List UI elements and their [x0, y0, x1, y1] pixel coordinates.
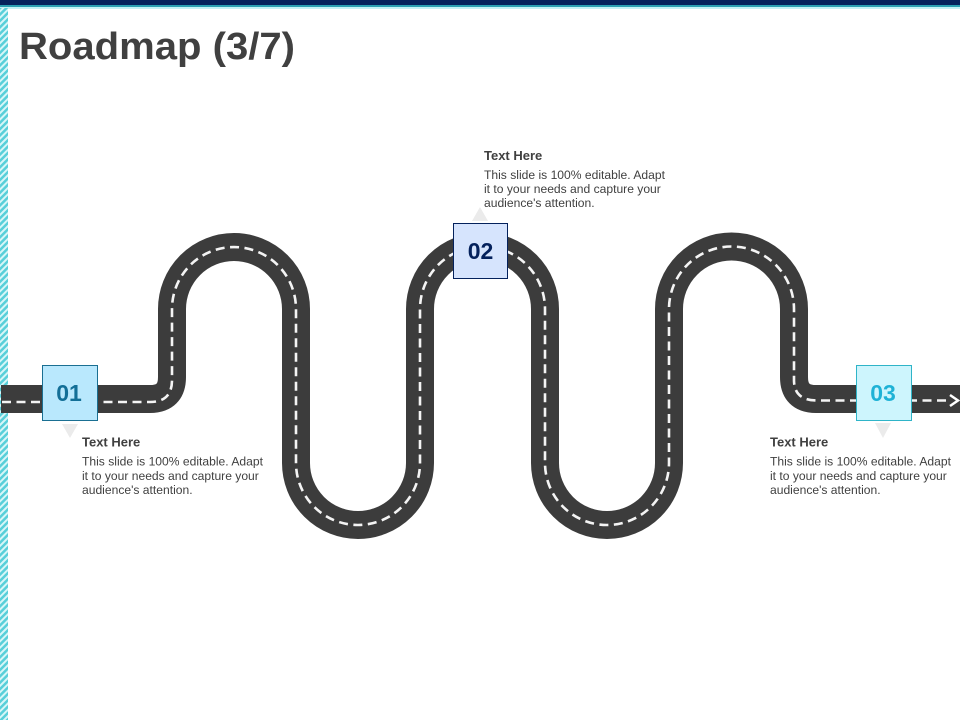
pointer 01: [62, 424, 78, 438]
number 02: 02: [468, 238, 493, 264]
text block 02: Text Here: [484, 148, 542, 163]
text block 02: This slide is 100% editable. Adapt: [484, 168, 666, 182]
text block 01: This slide is 100% editable. Adapt: [82, 454, 264, 468]
winding road: [1, 247, 960, 525]
text block 03: audience's attention.: [770, 483, 881, 497]
text block 03: it to your needs and capture your: [770, 469, 947, 483]
text block 02: audience's attention.: [484, 196, 595, 210]
text block 03: This slide is 100% editable. Adapt: [770, 454, 952, 468]
milestone 03: [856, 366, 912, 438]
road end arrow: [950, 395, 958, 406]
text block 01: [82, 434, 264, 497]
number 03: 03: [870, 380, 896, 406]
number box 01: [42, 366, 98, 420]
text block 01: Text Here: [82, 434, 140, 450]
text block 01: it to your needs and capture your: [82, 469, 259, 483]
number 01: 01: [56, 380, 82, 406]
text block 02: it to your needs and capture your: [484, 182, 661, 196]
number box 02: [454, 224, 508, 278]
text block 03: [770, 434, 952, 497]
number box 03: [856, 366, 912, 420]
milestone 01: [42, 366, 98, 438]
top header band: [0, 0, 960, 9]
left hatched stripe: [0, 8, 8, 720]
text block 02: [484, 148, 666, 210]
title: Roadmap (3/7): [19, 26, 295, 68]
text block 03: Text Here: [770, 434, 828, 450]
pointer 03: [875, 423, 891, 438]
milestone 02: [454, 207, 508, 278]
text block 01: audience's attention.: [82, 483, 193, 497]
pointer 02: [472, 207, 488, 221]
